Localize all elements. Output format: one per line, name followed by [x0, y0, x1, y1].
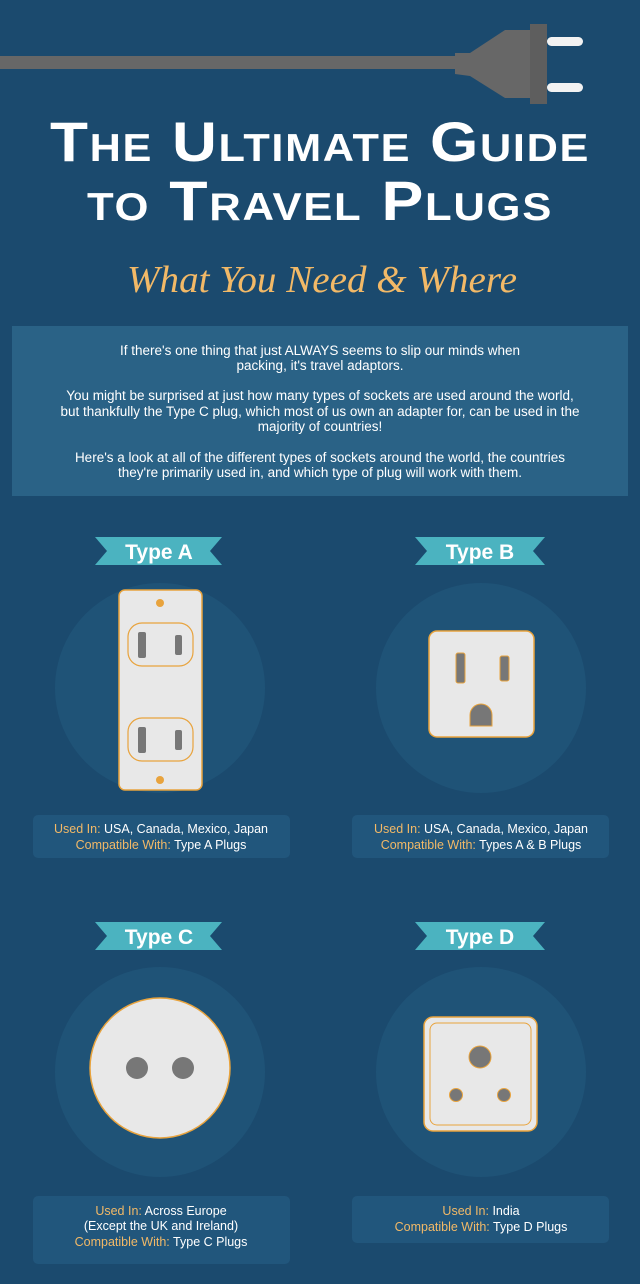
intro text box: You might be surprised at just how many types of sockets are used around the world,: [66, 388, 574, 403]
icon: plug and cable: [0, 24, 583, 104]
panel: Type C: [33, 922, 290, 1264]
info: Type C: Compatible With: Type C Plugs: [75, 1235, 247, 1249]
info: Type D: [352, 1196, 609, 1243]
ribbon: Type B: Type B: [446, 541, 514, 564]
intro text box: they're primarily used in, and which type of plug will work with them.: [118, 465, 522, 480]
title: [50, 110, 590, 232]
info: Type B: Compatible With: Types A & B Plugs: [381, 838, 581, 852]
ribbon: Type C: [95, 922, 222, 950]
info: Type C: [33, 1196, 290, 1264]
info: Type A: [33, 815, 290, 858]
ribbon: Type A: Type A: [125, 541, 193, 564]
panel: Type B: [352, 537, 609, 858]
icon: type D socket: [424, 1017, 537, 1131]
title: to Travel Plugs: [87, 169, 553, 232]
panel: Type D: [352, 922, 609, 1243]
intro text box: Here's a look at all of the different types of sockets around the world, the countries: [75, 450, 565, 465]
info: Type D: Compatible With: Type D Plugs: [395, 1220, 567, 1234]
info: Type A: Compatible With: Type A Plugs: [76, 838, 246, 852]
ribbon: Type D: Type D: [446, 926, 514, 949]
icon: type C socket: [90, 998, 230, 1138]
icon: type B socket: [429, 631, 534, 737]
icon: type A socket: [119, 590, 202, 790]
intro text box: but thankfully the Type C plug, which most of us own an adapter for, can be used in the: [60, 404, 580, 419]
intro text box: majority of countries!: [258, 419, 382, 434]
info: Type A: Used In: USA, Canada, Mexico, Japan: [54, 822, 268, 836]
intro text box: If there's one thing that just ALWAYS seems to slip our minds when: [120, 343, 520, 358]
title: The Ultimate Guide: [50, 110, 590, 173]
info: Type C: (Except the UK and Ireland): [84, 1219, 238, 1233]
info: Type B: [352, 815, 609, 858]
info: Type B: Used In: USA, Canada, Mexico, Japan: [374, 822, 588, 836]
subtitle: What You Need & Where: [127, 259, 517, 301]
ribbon: Type B: [415, 537, 545, 565]
intro text box: packing, it's travel adaptors.: [237, 358, 403, 373]
ribbon: Type C: Type C: [125, 926, 193, 949]
panel: Type A: [33, 537, 290, 858]
ribbon: Type A: [95, 537, 222, 565]
info: Type C: Used In: Across Europe: [95, 1204, 227, 1218]
info: Type D: Used In: India: [442, 1204, 520, 1218]
intro text box: [12, 326, 628, 496]
ribbon: Type D: [415, 922, 545, 950]
